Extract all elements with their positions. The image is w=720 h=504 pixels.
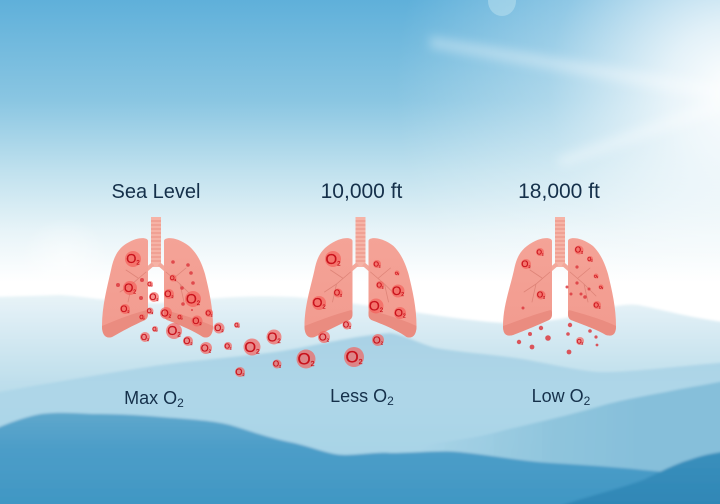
oxygen bubbles: flowing stream bbox=[140, 320, 384, 377]
oxygen bubbles: 18,000 ft lungs: 2 bbox=[542, 252, 544, 256]
label: Less O2: 2 bbox=[387, 394, 394, 408]
oxygen bubbles: sea level lungs: 2 bbox=[211, 313, 213, 317]
label: Low O2: Low O bbox=[532, 386, 584, 406]
oxygen bubbles: 10,000 ft lungs bbox=[312, 251, 406, 320]
oxygen bubbles: 18,000 ft lungs: O bbox=[594, 274, 597, 278]
oxygen bubbles: flowing stream: O bbox=[235, 367, 242, 377]
oxygen bubbles: sea level lungs: O bbox=[192, 316, 199, 326]
oxygen bubbles: 10,000 ft lungs: 2 bbox=[323, 304, 326, 310]
oxygen bubbles: flowing stream: O bbox=[224, 344, 230, 350]
lens flare orb bbox=[488, 0, 516, 16]
oxygen bubbles: sea level lungs: 2 bbox=[127, 309, 130, 314]
oxygen bubbles: flowing stream: O bbox=[373, 336, 381, 346]
oxygen bubbles: flowing stream: 2 bbox=[381, 340, 384, 346]
oxygen bubbles: flowing stream: 2 bbox=[156, 331, 158, 333]
sun glow bbox=[300, 0, 720, 430]
oxygen bubbles: 18,000 ft lungs: O bbox=[537, 290, 543, 300]
oxygen bubbles: 10,000 ft lungs: O bbox=[376, 282, 382, 290]
oxygen bubbles: flowing stream: 2 bbox=[230, 346, 232, 350]
heading: 18,000 ft: 18,000 ft bbox=[518, 180, 600, 203]
oxygen bubbles: sea level lungs: 2 bbox=[171, 294, 174, 299]
oxygen dots: 18,000 ft lungs bbox=[517, 265, 598, 354]
oxygen bubbles: 18,000 ft lungs: O bbox=[577, 340, 582, 346]
oxygen bubbles: 18,000 ft lungs: 2 bbox=[599, 305, 601, 309]
oxygen bubbles: flowing stream: O bbox=[234, 323, 238, 329]
oxygen bubbles: sea level lungs: O bbox=[124, 281, 133, 295]
oxygen bubbles: flowing stream: O bbox=[345, 348, 359, 366]
oxygen bubbles: sea level lungs bbox=[120, 251, 213, 326]
oxygen bubbles: sea level lungs: O bbox=[161, 308, 169, 320]
oxygen bubbles: 10,000 ft lungs: 2 bbox=[379, 264, 381, 268]
oxygen bubbles: 18,000 ft lungs: O bbox=[536, 250, 542, 256]
oxygen bubbles: 10,000 ft lungs: 2 bbox=[380, 308, 384, 314]
oxygen bubbles: flowing stream: O bbox=[273, 360, 279, 368]
oxygen bubbles: 18,000 ft lungs: O bbox=[575, 246, 581, 254]
oxygen bubbles: sea level lungs: 2 bbox=[151, 286, 153, 288]
sun rays bbox=[430, 36, 720, 168]
oxygen bubbles: flowing stream: 2 bbox=[242, 372, 245, 377]
oxygen bubbles: flowing stream: 2 bbox=[349, 326, 351, 330]
oxygen bubbles: 18,000 ft lungs: 2 bbox=[543, 296, 545, 300]
oxygen bubbles: sea level lungs: 2 bbox=[169, 314, 172, 318]
oxygen bubbles: flowing stream: O bbox=[167, 323, 177, 338]
oxygen bubbles: sea level lungs: O bbox=[177, 315, 181, 321]
oxygen bubbles: flowing stream: 2 bbox=[238, 327, 240, 329]
oxygen bubbles: 18,000 ft lungs: 2 bbox=[528, 264, 531, 269]
oxygen bubbles: sea level lungs: O bbox=[120, 304, 127, 314]
oxygen bubbles: flowing stream: 2 bbox=[277, 339, 281, 345]
oxygen bubbles: flowing stream: 2 bbox=[221, 328, 224, 333]
oxygen bubbles: sea level lungs: 2 bbox=[156, 297, 159, 302]
oxygen bubbles: sea level lungs: O bbox=[205, 310, 211, 318]
oxygen bubbles: 10,000 ft lungs: O bbox=[325, 251, 337, 268]
oxygen bubbles: sea level lungs: O bbox=[147, 282, 151, 288]
oxygen bubbles: flowing stream: O bbox=[201, 344, 209, 354]
oxygen bubbles: sea level lungs: O bbox=[186, 290, 197, 306]
oxygen bubbles: 10,000 ft lungs: O bbox=[394, 308, 403, 320]
oxygen bubbles: sea level lungs: 2 bbox=[174, 278, 176, 282]
oxygen bubbles: 10,000 ft lungs: O bbox=[369, 298, 380, 314]
oxygen bubbles: 10,000 ft lungs: O bbox=[334, 288, 340, 298]
oxygen bubbles: 10,000 ft lungs: 2 bbox=[398, 274, 400, 276]
oxygen bubbles: flowing stream: O bbox=[152, 327, 156, 333]
heading: 10,000 ft: 10,000 ft bbox=[321, 180, 403, 203]
oxygen bubbles: sea level lungs: 2 bbox=[152, 311, 154, 315]
oxygen bubbles: flowing stream: O bbox=[319, 332, 327, 344]
oxygen bubbles: 10,000 ft lungs: 2 bbox=[401, 292, 404, 298]
oxygen bubbles: sea level lungs: 2 bbox=[181, 319, 183, 321]
oxygen bubbles: flowing stream: O bbox=[141, 333, 147, 342]
lungs: 18,000 ft bbox=[503, 217, 616, 336]
oxygen bubbles: sea level lungs: O bbox=[164, 289, 171, 299]
oxygen bubbles: sea level lungs: O bbox=[170, 276, 174, 282]
oxygen bubbles: flowing stream: 2 bbox=[311, 361, 315, 368]
label: Max O2: Max O bbox=[124, 388, 177, 408]
oxygen bubbles: 18,000 ft lungs: O bbox=[587, 257, 591, 263]
oxygen bubbles: 18,000 ft lungs: 2 bbox=[581, 250, 583, 254]
oxygen bubbles: sea level lungs: 2 bbox=[133, 290, 136, 296]
oxygen bubbles: sea level lungs: 2 bbox=[143, 319, 145, 321]
oxygen bubbles: flowing stream: O bbox=[214, 323, 221, 333]
oxygen bubbles: 10,000 ft lungs: 2 bbox=[382, 285, 384, 289]
oxygen bubbles: flowing stream: O bbox=[244, 339, 256, 356]
oxygen bubbles: flowing stream: 2 bbox=[359, 359, 363, 366]
oxygen bubbles: flowing stream: 2 bbox=[256, 348, 260, 356]
oxygen bubbles: flowing stream: O bbox=[297, 350, 311, 368]
oxygen bubbles: flowing stream: O bbox=[343, 320, 349, 330]
lungs: 10,000 ft bbox=[304, 217, 416, 337]
oxygen bubbles: flowing stream: 2 bbox=[209, 348, 212, 354]
oxygen bubbles: sea level lungs: 2 bbox=[136, 260, 140, 266]
oxygen bubbles: 18,000 ft lungs bbox=[521, 246, 604, 346]
label: Less O2: Less O bbox=[330, 386, 387, 406]
oxygen bubbles: 18,000 ft lungs: 2 bbox=[602, 288, 604, 290]
label: Max O2: 2 bbox=[177, 396, 184, 410]
heading: Sea Level: Sea Level bbox=[112, 181, 200, 203]
oxygen bubbles: 10,000 ft lungs: O bbox=[312, 295, 323, 310]
oxygen bubbles: flowing stream: 2 bbox=[147, 338, 149, 342]
oxygen bubbles: 18,000 ft lungs: 2 bbox=[597, 277, 599, 279]
oxygen bubbles: flowing stream: O bbox=[267, 330, 277, 344]
oxygen bubbles: sea level lungs: O bbox=[139, 315, 143, 321]
oxygen bubbles: sea level lungs: 2 bbox=[197, 301, 201, 307]
oxygen bubbles: 18,000 ft lungs: 2 bbox=[582, 341, 584, 345]
oxygen bubbles: flowing stream: 2 bbox=[190, 341, 193, 346]
oxygen bubbles: flowing stream: 2 bbox=[327, 338, 330, 342]
oxygen bubbles: 10,000 ft lungs: 2 bbox=[337, 262, 341, 268]
oxygen bubbles: flowing stream: 2 bbox=[279, 364, 281, 368]
lungs: sea level bbox=[102, 217, 213, 337]
oxygen bubbles: 18,000 ft lungs: O bbox=[521, 259, 528, 269]
label: Low O2: 2 bbox=[584, 394, 591, 408]
oxygen bubbles: sea level lungs: O bbox=[147, 309, 152, 315]
oxygen bubbles: sea level lungs: O bbox=[126, 251, 136, 266]
oxygen bubbles: 18,000 ft lungs: O bbox=[593, 302, 599, 310]
oxygen bubbles: flowing stream: O bbox=[183, 336, 190, 346]
oxygen bubbles: 10,000 ft lungs: O bbox=[373, 262, 379, 268]
oxygen bubbles: 10,000 ft lungs: O bbox=[392, 284, 401, 298]
oxygen bubbles: 10,000 ft lungs: O bbox=[395, 270, 398, 276]
oxygen bubbles: 10,000 ft lungs: 2 bbox=[340, 294, 342, 298]
oxygen bubbles: 18,000 ft lungs: O bbox=[599, 284, 602, 290]
oxygen bubbles: flowing stream: 2 bbox=[177, 332, 181, 338]
oxygen bubbles: sea level lungs: O bbox=[149, 292, 156, 302]
oxygen bubbles: 18,000 ft lungs: 2 bbox=[591, 260, 593, 263]
left glow bbox=[20, 217, 110, 307]
oxygen bubbles: sea level lungs: 2 bbox=[199, 321, 202, 326]
mountains bbox=[0, 295, 720, 504]
oxygen bubbles: 10,000 ft lungs: 2 bbox=[403, 314, 406, 320]
oxygen dots: sea level lungs bbox=[116, 260, 195, 311]
